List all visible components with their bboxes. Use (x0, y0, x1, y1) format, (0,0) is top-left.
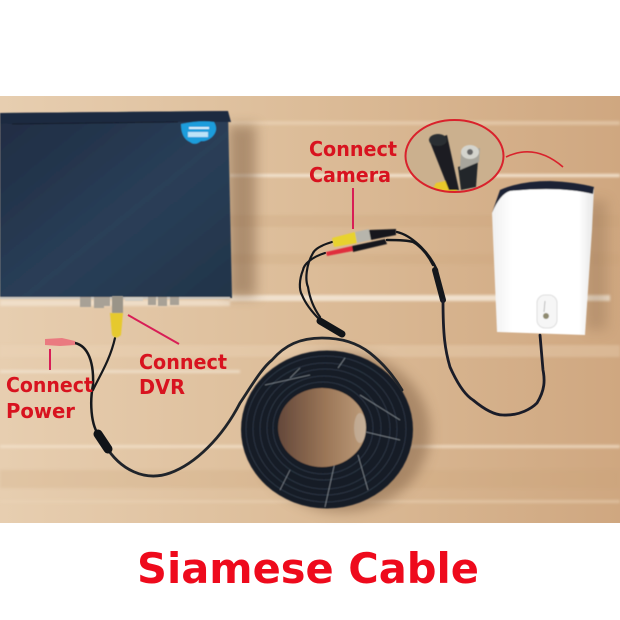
title: Siamese Cable (137, 544, 479, 593)
label: connect power: Connect (6, 373, 93, 397)
camera dark top rim (492, 181, 594, 213)
splitter: power side (98, 434, 108, 449)
cable coil (241, 350, 413, 508)
pointer: connect power (49, 349, 51, 370)
splitter: near coil (320, 321, 342, 334)
label: connect DVR: Connect (139, 350, 227, 374)
wooden table background (0, 96, 620, 523)
DVR top panel (0, 111, 232, 298)
camera white body (492, 188, 594, 335)
label: connect DVR: DVR (139, 375, 185, 399)
label: connect camera: Camera (309, 163, 391, 187)
arrow: inset to camera (506, 152, 563, 167)
camera-end cables (300, 232, 544, 415)
power DC jack (45, 338, 75, 346)
label: connect DVR (139, 350, 227, 399)
label: connect camera (309, 137, 397, 187)
coil centre hole (278, 388, 366, 467)
DVR BNC ports (80, 297, 179, 308)
camera housing (492, 181, 594, 335)
pointer: connect DVR (128, 315, 179, 344)
BNC and DC connectors, camera end (326, 229, 396, 256)
cable: power and video tails to splitter (75, 338, 115, 437)
DVR recorder (0, 111, 232, 308)
shadows on the table (228, 125, 607, 512)
label: connect camera: Connect (309, 137, 397, 161)
DVR blue sticker (181, 121, 216, 144)
label: connect power: Power (6, 399, 75, 423)
infographic: Siamese cable connection photo (0, 96, 620, 584)
pointer: connect camera (352, 188, 354, 229)
camera mount plate (537, 295, 557, 328)
label: connect power (6, 373, 93, 423)
inset: connector close-up (406, 120, 504, 192)
DVR yellow BNC plug (110, 296, 123, 338)
cable: main run from splitter over the coil (105, 338, 402, 476)
